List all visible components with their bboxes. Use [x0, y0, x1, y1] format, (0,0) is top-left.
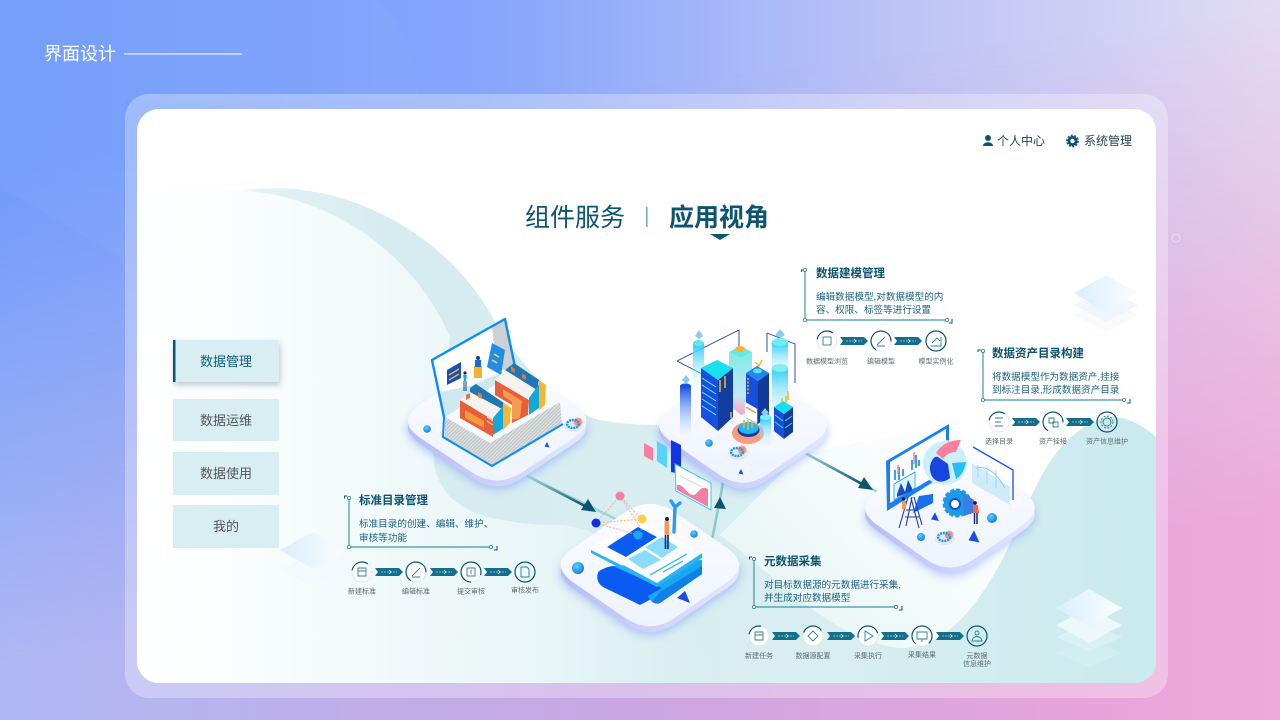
- large gear: [944, 490, 974, 516]
- red and blue binders: [460, 363, 546, 437]
- side navigation: [173, 340, 279, 548]
- top menu: user centre and system management: [983, 133, 1132, 148]
- tall teal tower: [729, 346, 752, 415]
- balls, cones and gear on platform: [987, 513, 997, 523]
- worker beside gear: [973, 501, 979, 524]
- nav item: usage: [173, 452, 279, 495]
- nav item: usage: 数据使用: [200, 466, 252, 481]
- process steps: [806, 327, 954, 366]
- platform: data modelling city: [659, 329, 827, 491]
- process steps: 编辑标准: [402, 586, 430, 596]
- top menu: user centre and system management: 系统管理: [1084, 133, 1132, 148]
- process steps: 数据模型浏览: [806, 356, 848, 366]
- platform: standards book: [408, 319, 586, 488]
- process steps: 新建标准: [348, 586, 376, 596]
- process steps: 资产信息维护: [1086, 436, 1128, 446]
- callout: data modelling management: [802, 266, 954, 366]
- dark blue tower: [746, 360, 769, 424]
- nav item: mine: 我的: [213, 519, 239, 534]
- callout: data modelling management: 容、权限、标签等进行设置: [816, 304, 932, 316]
- process steps: [745, 622, 991, 668]
- nav item: operations: 数据运维: [200, 413, 252, 428]
- process steps: 信息维护: [963, 659, 991, 668]
- process steps: [985, 408, 1128, 446]
- small cylinder: [760, 408, 771, 447]
- open page: [591, 518, 702, 587]
- arrow: city platform to monitor platform: [803, 452, 885, 496]
- left cylinder tower: [680, 375, 691, 436]
- callout: standards catalogue management: 标准目录管理: [359, 493, 428, 507]
- left top cylinder: [693, 330, 704, 393]
- decoration: diamond stack upper right: [1074, 275, 1138, 332]
- process steps: 编辑模型: [867, 356, 895, 366]
- cards and area chart panel: [644, 440, 711, 510]
- callout: data asset catalogue build: 将数据模型作为数据资产,挂接: [992, 371, 1120, 383]
- wire frames behind buildings: [677, 330, 795, 383]
- outer glass panel: [125, 94, 1168, 698]
- view switch tabs: [525, 203, 769, 240]
- callout: metadata collection: 并生成对应数据模型: [764, 592, 851, 604]
- callout: data asset catalogue build: 到标注目录,形成数据资产目录: [992, 384, 1120, 396]
- balls and cone: [572, 562, 584, 574]
- rear binder: [495, 380, 529, 423]
- callout: metadata collection: 元数据采集: [764, 554, 822, 568]
- process steps: 新建任务: [745, 651, 773, 660]
- platform: data catalogue book: [561, 440, 739, 634]
- callout: metadata collection: [745, 554, 991, 668]
- callout: standards catalogue management: 审核等功能: [359, 532, 407, 544]
- callout: metadata collection: 对目标数据源的元数据进行采集,: [764, 579, 901, 591]
- callout: data modelling management: 编辑数据模型,对数据模型的内: [816, 291, 943, 303]
- platform: monitor analytics: [865, 424, 1035, 576]
- process steps: [348, 558, 539, 596]
- main server tower: [701, 360, 733, 431]
- arrow: book platform to catalogue platform: [527, 476, 620, 521]
- network nodes: [592, 492, 646, 540]
- process steps: 审核发布: [511, 586, 539, 594]
- right cylinders: [772, 329, 788, 420]
- monitor: [886, 424, 949, 513]
- open book base: [443, 372, 563, 466]
- book page wall: [432, 319, 524, 422]
- process steps: 元数据: [966, 651, 988, 660]
- pie chart: [922, 440, 968, 486]
- callout: data asset catalogue build: 数据资产目录构建: [992, 346, 1084, 360]
- main white panel: [137, 109, 1156, 683]
- ladder with worker: [899, 497, 922, 528]
- view switch tabs: 应用视角: [669, 203, 769, 232]
- decoration: diamond stack lower right: [1056, 589, 1122, 667]
- view switch tabs: 组件服务: [525, 204, 625, 232]
- glass chart panel: [972, 447, 1013, 505]
- process steps: 采集执行: [854, 651, 882, 660]
- callout: standards catalogue management: 标准目录的创建、编辑、维护、: [359, 518, 493, 530]
- process steps: 数据源配置: [796, 651, 830, 660]
- front binder: [460, 400, 493, 437]
- process steps: 模型实例化: [918, 356, 954, 366]
- disc with chart: [732, 402, 764, 444]
- nav item: operations: [173, 399, 279, 441]
- process steps: 提交审核: [457, 586, 485, 596]
- nav item: active: [173, 340, 279, 382]
- book cylinder: [597, 560, 702, 605]
- callout: standards catalogue management: [344, 493, 539, 596]
- decoration: diamond left: [280, 532, 346, 586]
- tiny workers in book: [463, 356, 482, 391]
- process steps: 资产挂接: [1039, 436, 1067, 446]
- callout: data asset catalogue build: [978, 346, 1130, 446]
- nav item: active: 数据管理: [200, 354, 252, 369]
- chart cards on book wall: [447, 343, 505, 385]
- page heading: 界面设计: [44, 44, 116, 64]
- callout: data modelling management: 数据建模管理: [816, 266, 885, 280]
- nav item: mine: [173, 505, 279, 548]
- process steps: 选择目录: [985, 436, 1013, 446]
- small server: [774, 391, 793, 439]
- top menu: user centre and system management: 个人中心: [997, 133, 1045, 148]
- arrow: catalogue platform up to city platform: [712, 478, 726, 540]
- ball, gear and cone: [705, 439, 713, 447]
- person with wrench: [664, 501, 680, 549]
- ball, cone and gear on platform: [423, 425, 431, 433]
- process steps: 采集结果: [908, 650, 936, 659]
